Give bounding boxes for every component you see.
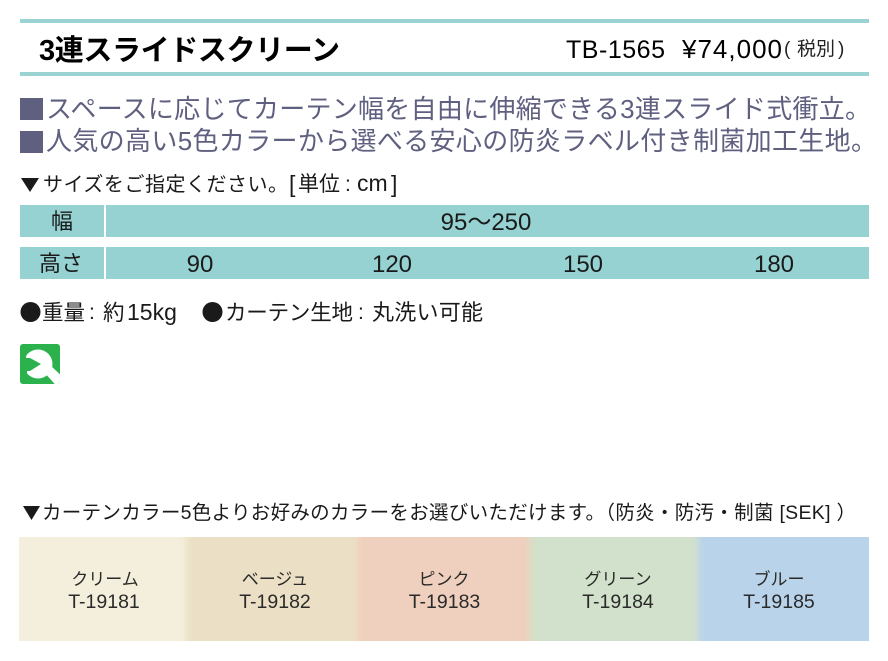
colour swatches [19,537,869,641]
swatch: pink [409,570,480,613]
width row: 幅 [51,209,73,234]
product code and price: TB-1565 [566,36,665,64]
swatch: cream: T-19181 [68,591,140,613]
title: 3連スライドスクリーン [39,34,340,67]
swatch: green: グリーン [584,570,652,589]
description text [20,94,877,156]
width row: 95～250 [441,209,531,236]
size heading [21,170,397,197]
product code and price: ¥74,000 [681,34,782,64]
height row [39,251,794,278]
swatch: green [582,570,654,613]
weight and fabric notes: 約 [103,301,125,325]
height row: 120 [372,251,412,278]
product code and price [566,34,844,64]
swatch: cream [68,570,140,613]
swatch: pink: ピンク [418,570,470,589]
swatch: blue: ブルー [754,569,804,589]
icon: wrench [20,344,60,384]
weight and fabric notes: : [89,301,95,324]
height row: 150 [563,251,603,278]
weight and fabric notes [20,299,483,325]
size heading: [ [289,171,296,197]
width row [51,209,531,236]
swatch: beige: T-19182 [239,591,311,613]
product code and price: ( [784,39,791,60]
colour heading: カーテンカラー5色よりお好みのカラーをお選びいただけます。（防炎・防汚・制菌 [SEK] ） [42,502,856,524]
header band [20,19,869,76]
swatch: blue [743,569,815,613]
height row: 180 [754,251,794,278]
description text: スペースに応じてカーテン幅を自由に伸縮できる3連スライド式衝立。 [46,94,871,124]
size heading: サイズをご指定ください。 [43,173,288,196]
product code and price: ) [838,39,844,60]
weight and fabric notes: カーテン生地 [225,301,353,325]
size heading: cm [357,170,388,196]
height row: 90 [187,251,213,278]
weight and fabric notes: 丸洗い可能 [372,300,483,325]
swatch: beige [239,570,311,613]
product code and price: 税別 [797,38,835,60]
size heading: ] [391,171,397,197]
swatch: beige: ベージュ [242,570,308,589]
swatch: cream: クリーム [71,570,139,589]
weight and fabric notes: 重量 [42,301,85,325]
weight and fabric notes: : [358,301,364,324]
size heading: 単位 [298,173,340,196]
weight and fabric notes: 15kg [127,299,177,325]
swatch: pink: T-19183 [409,591,480,613]
swatch: blue: T-19185 [743,591,815,613]
size heading: : [345,173,351,196]
swatch: green: T-19184 [582,591,654,613]
description text: 人気の高い5色カラーから選べる安心の防炎ラベル付き制菌加工生地。 [46,126,877,156]
height row: 高さ [39,251,83,276]
size table [20,205,869,279]
